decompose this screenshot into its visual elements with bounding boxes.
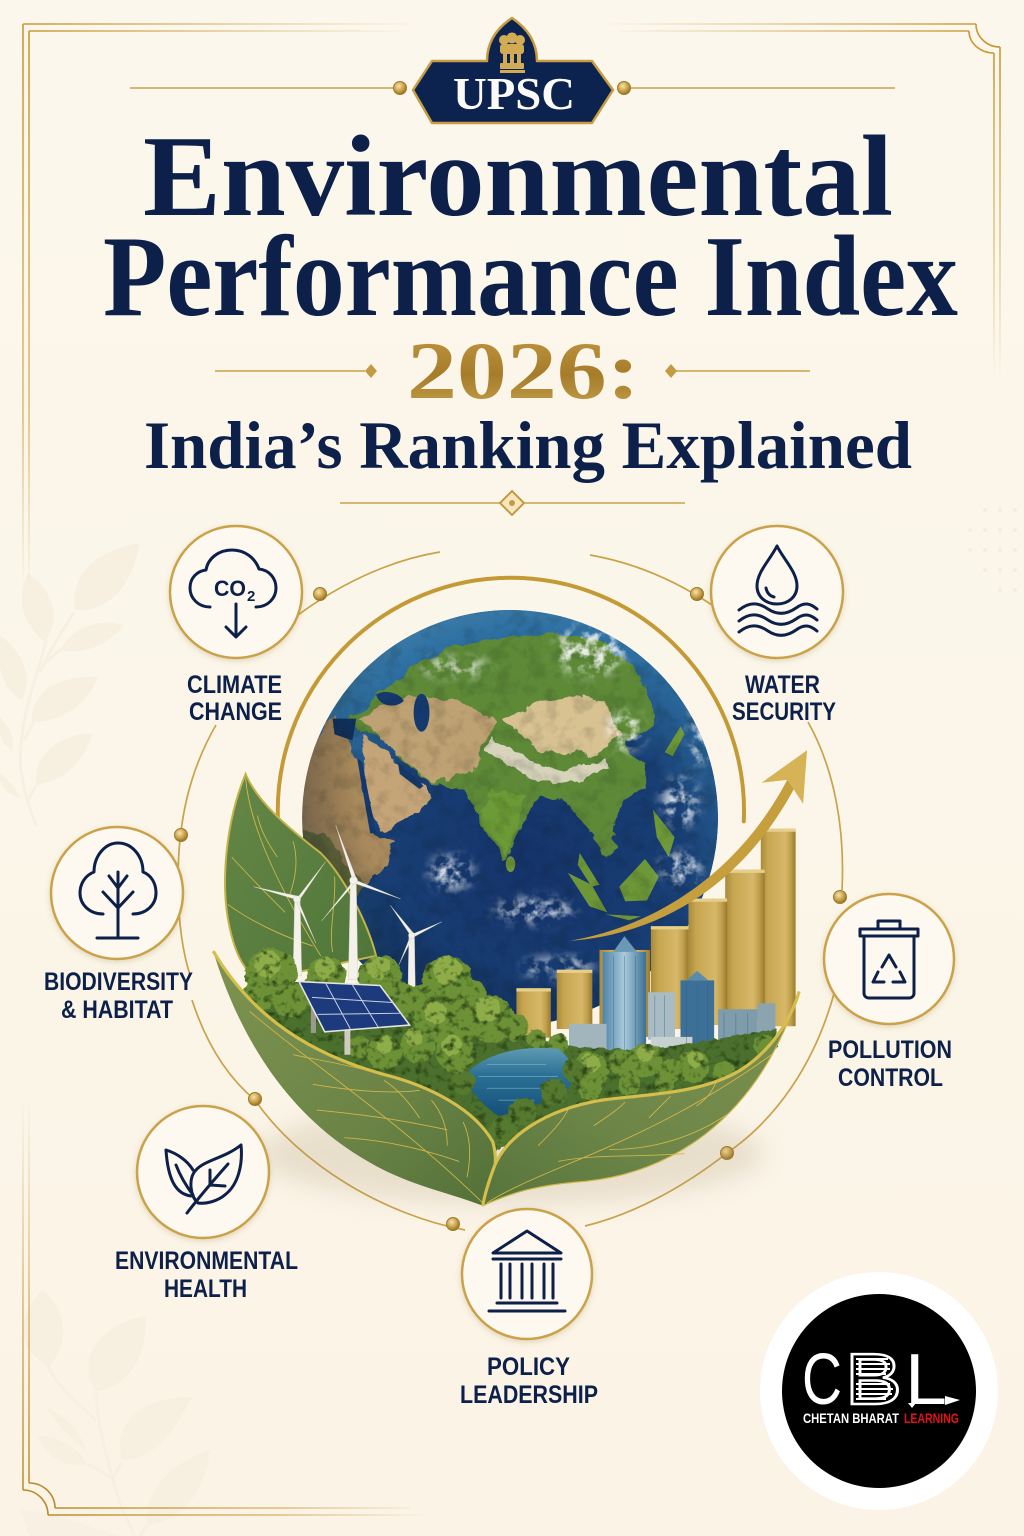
growth arrow <box>570 750 807 941</box>
node: policy leadership <box>460 1209 598 1409</box>
node: climate change <box>170 526 302 726</box>
lake <box>451 1048 586 1147</box>
UPSC badge <box>413 18 613 123</box>
inner seas <box>333 692 429 833</box>
node: water security: WATER <box>745 671 820 699</box>
emblem <box>499 32 525 73</box>
subtitle: India’s Ranking Explained <box>144 407 912 483</box>
clouds <box>420 628 710 976</box>
continents <box>289 632 657 901</box>
logo letters: B <box>845 1340 902 1420</box>
node: pollution control <box>824 894 954 1092</box>
logo letters: C <box>802 1340 842 1420</box>
node: biodiversity and habitat: BIODIVERSITY <box>44 968 193 996</box>
node: pollution control: POLLUTION <box>828 1036 952 1064</box>
logo: Chetan Bharat Learning: CHETAN BHARAT <box>803 1410 899 1426</box>
decorative leaves left <box>0 543 210 1536</box>
wind turbines <box>253 825 442 1008</box>
node: policy leadership: LEADERSHIP <box>460 1381 598 1409</box>
logo: Chetan Bharat Learning <box>760 1272 998 1510</box>
globe <box>289 610 718 1026</box>
node: environmental health <box>115 1106 298 1303</box>
icon: CO2 cloud <box>170 526 302 658</box>
glass buildings <box>569 936 775 1057</box>
UPSC badge: UPSC <box>453 68 575 119</box>
icon: CO2 cloud: 2 <box>247 588 255 605</box>
connector ring <box>174 552 846 1230</box>
centre illustration: earth, leaves, city <box>213 578 807 1206</box>
node: biodiversity and habitat <box>44 827 193 1024</box>
year: 2026: <box>407 325 640 416</box>
front leaf right <box>483 991 799 1206</box>
faint dot pattern <box>968 508 1017 592</box>
logo letters <box>802 1340 960 1420</box>
subtitle divider <box>340 491 685 515</box>
limb shade <box>302 650 651 1022</box>
node: climate change: CHANGE <box>189 698 282 726</box>
icon: recycling bin <box>824 894 954 1024</box>
icon: twin leaves <box>137 1106 269 1238</box>
lakeside trees <box>451 1059 586 1147</box>
logo: Chetan Bharat Learning: LEARNING <box>904 1410 959 1426</box>
icon: tree <box>51 827 183 959</box>
node: environmental health: ENVIRONMENTAL <box>115 1247 298 1275</box>
gold bar chart <box>516 829 796 1038</box>
back leaf <box>225 774 376 980</box>
logo letters: L <box>905 1340 947 1420</box>
trees <box>234 948 779 1154</box>
header ornament lines <box>130 82 895 94</box>
islands <box>506 727 684 920</box>
texture <box>302 610 718 1026</box>
front leaf left <box>213 951 495 1206</box>
node: policy leadership: POLICY <box>487 1353 570 1381</box>
node: water security: SECURITY <box>732 698 836 726</box>
title: Performance Index <box>103 213 958 340</box>
bowl shadow <box>257 1102 764 1205</box>
solar panel <box>299 982 410 1055</box>
node: water security <box>711 526 843 726</box>
icon: CO2 cloud: CO <box>214 576 246 601</box>
year divider <box>215 364 810 378</box>
title <box>103 113 958 340</box>
node: climate change: CLIMATE <box>187 671 282 699</box>
node: biodiversity and habitat: & HABITAT <box>61 996 173 1024</box>
node: environmental health: HEALTH <box>164 1275 247 1303</box>
icon: water drop and waves <box>711 526 843 658</box>
gold arc <box>278 578 744 821</box>
title: Environmental <box>143 113 893 240</box>
icon: government building <box>462 1209 592 1339</box>
node: pollution control: CONTROL <box>838 1064 943 1092</box>
